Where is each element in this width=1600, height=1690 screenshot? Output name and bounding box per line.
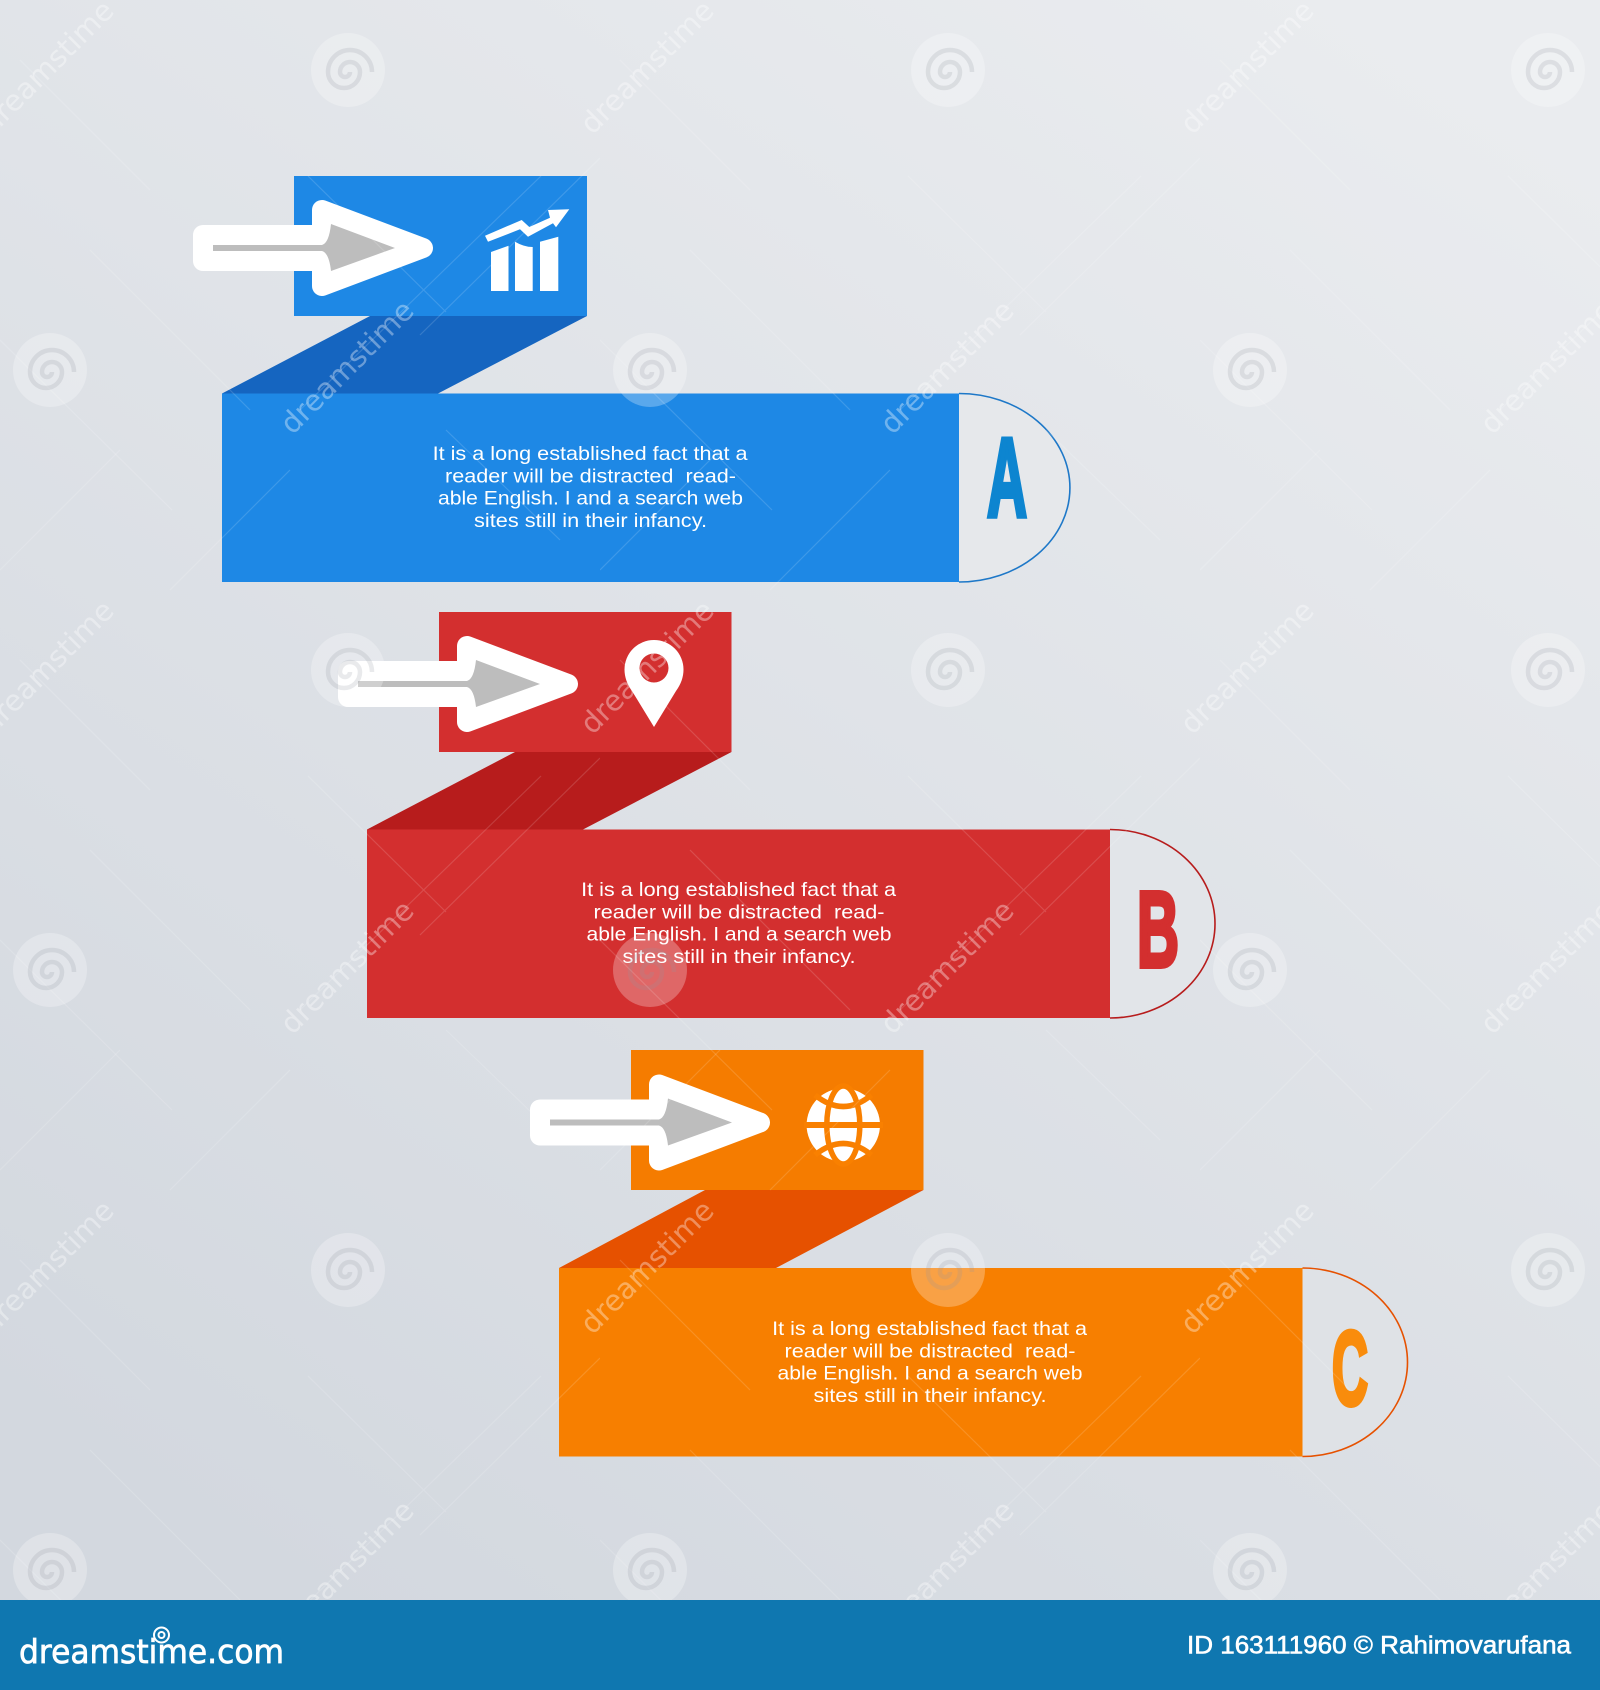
step B end cap	[1110, 830, 1215, 1018]
watermark text: dreamstime	[1173, 1193, 1321, 1341]
step C body text: sites still in their infancy.	[814, 1385, 1046, 1407]
step B body text	[581, 879, 896, 968]
step C end cap	[1302, 1268, 1408, 1456]
step B body text: It is a long established fact that a	[581, 879, 896, 901]
footer logo: dreamstime.com	[19, 1632, 284, 1671]
step A arrow	[203, 210, 423, 286]
watermark text: dreamstime	[873, 893, 1021, 1041]
step B text panel	[367, 830, 1110, 1018]
step C fold	[559, 1190, 924, 1268]
step C ribbon: C	[1332, 1310, 1368, 1428]
step C text panel	[559, 1268, 1302, 1456]
footer logo spiral	[154, 1628, 169, 1642]
step C body text: It is a long established fact that a	[772, 1318, 1087, 1340]
step C top panel	[631, 1050, 924, 1190]
step A body text: able English. I and a search web	[438, 488, 743, 510]
watermark text: dreamstime	[273, 893, 421, 1041]
watermark text: dreamstime	[273, 293, 421, 441]
step B body text: reader will be distracted read-	[594, 901, 884, 923]
step C body text: able English. I and a search web	[778, 1363, 1083, 1385]
watermark text: dreamstime	[873, 1493, 1021, 1641]
step A end cap	[959, 394, 1070, 582]
footer credit: ID 163111960 © Rahimovarufana	[1187, 1632, 1571, 1660]
step A fold	[222, 316, 587, 394]
step A body text: reader will be distracted read-	[445, 465, 736, 487]
step A ribbon: A	[987, 416, 1027, 540]
step B letter: B	[1137, 870, 1179, 990]
step A ribbon	[203, 176, 1070, 582]
step C body text: reader will be distracted read-	[784, 1340, 1076, 1362]
step B body text: sites still in their infancy.	[622, 946, 856, 968]
watermark text: dreamstime	[1173, 593, 1321, 741]
icon: growth chart	[485, 209, 569, 291]
icon: globe	[804, 1086, 883, 1164]
watermark text: dreamstime	[273, 1493, 421, 1641]
step B arrow	[348, 646, 568, 722]
step A body text	[433, 443, 748, 532]
step A body text: It is a long established fact that a	[433, 443, 748, 465]
step B fold	[367, 752, 732, 830]
icon: map pin	[624, 640, 684, 727]
step B body text: able English. I and a search web	[586, 924, 892, 946]
step A top panel	[294, 176, 587, 316]
watermark text: dreamstime	[873, 293, 1021, 441]
step B ribbon	[348, 612, 1215, 1018]
watermark text: dreamstime	[573, 1193, 721, 1341]
step A text panel	[222, 394, 959, 582]
step A body text: sites still in their infancy.	[474, 510, 707, 532]
step C arrow	[540, 1084, 760, 1160]
footer band	[0, 1600, 1600, 1690]
step B top panel	[439, 612, 732, 752]
watermark text: dreamstime	[573, 593, 721, 741]
step C ribbon	[540, 1050, 1408, 1456]
step C body text	[772, 1318, 1087, 1407]
